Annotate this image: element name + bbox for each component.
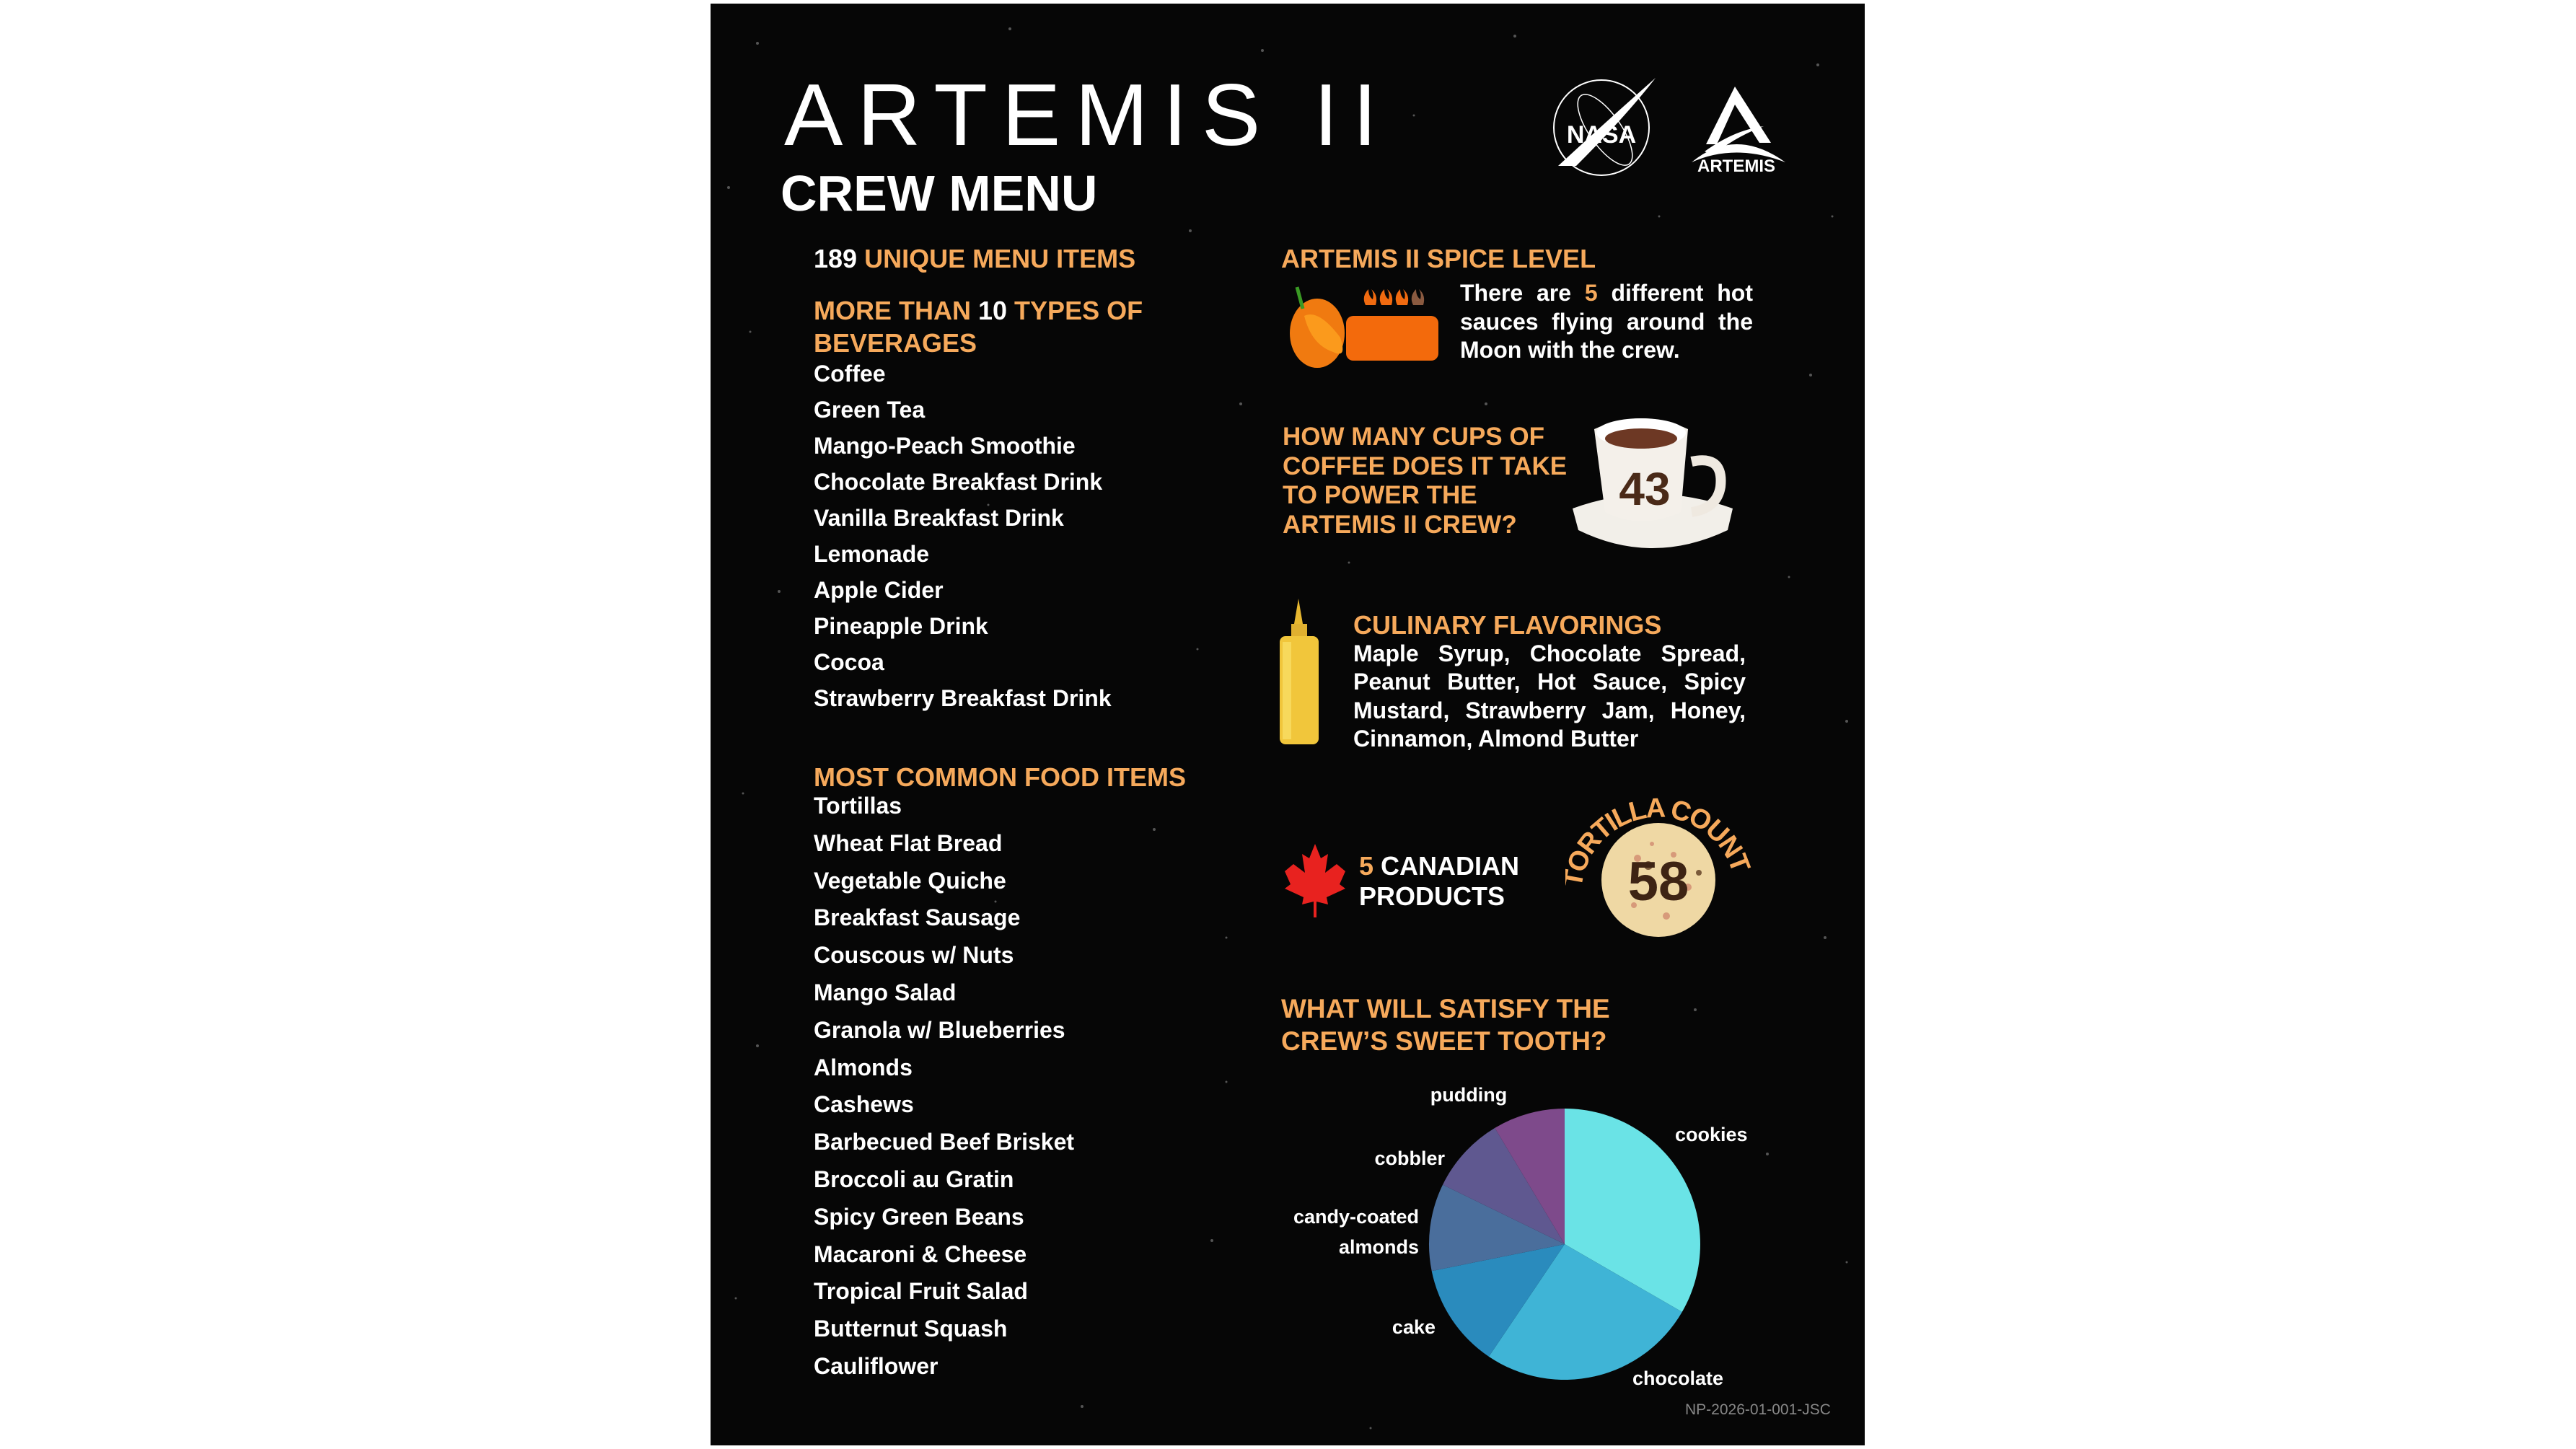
list: beverages: Green Tea: [814, 397, 925, 423]
text: flavorings list: Peanut Butter, Hot Sauce, Spicy: [1353, 669, 1746, 695]
pie chart: sweets: candy-coated: [1293, 1206, 1419, 1228]
list: food items: Breakfast Sausage: [814, 904, 1020, 930]
list: food items: Mango Salad: [814, 979, 956, 1005]
text: hot sauces: Moon with the crew.: [1460, 337, 1680, 363]
heading: coffee question: [1283, 423, 1567, 539]
text: flavorings list: Maple Syrup, Chocolate Spread,: [1353, 640, 1746, 666]
heading: sweet tooth: [1281, 994, 1610, 1056]
logo: Artemis: [1692, 87, 1785, 176]
list: food items: Vegetable Quiche: [814, 868, 1006, 894]
logo: NASA: NASA: [1567, 121, 1636, 149]
list: beverages: [814, 361, 1112, 711]
list: food items: Wheat Flat Bread: [814, 830, 1002, 856]
icon: maple leaf: [1285, 844, 1345, 917]
list: beverages: Cocoa: [814, 649, 884, 675]
text: hot sauces: [1460, 280, 1753, 363]
heading: coffee question: TO POWER THE: [1283, 481, 1477, 509]
icon: mustard bottle: [1280, 599, 1319, 744]
logo: Artemis: ARTEMIS: [1697, 157, 1775, 176]
icon: coffee cup 43: 43: [1619, 463, 1671, 515]
list: food items: Spicy Green Beans: [814, 1204, 1024, 1230]
stat: 189 unique menu items: 189 UNIQUE MENU ITEMS: [814, 244, 1135, 273]
list: food items: Granola w/ Blueberries: [814, 1017, 1065, 1043]
list: food items: Cashews: [814, 1091, 914, 1117]
heading: coffee question: COFFEE DOES IT TAKE: [1283, 452, 1567, 480]
list: beverages: Apple Cider: [814, 577, 944, 603]
list: beverages: Coffee: [814, 361, 886, 387]
list: food items: Tropical Fruit Salad: [814, 1278, 1028, 1304]
list: food items: Barbecued Beef Brisket: [814, 1129, 1074, 1155]
list: food items: Butternut Squash: [814, 1316, 1007, 1342]
logo: NASA: [1553, 78, 1656, 176]
list: beverages: Chocolate Breakfast Drink: [814, 469, 1102, 495]
heading: coffee question: ARTEMIS II CREW?: [1283, 511, 1517, 539]
icon: pepper and hot sauce: [1290, 286, 1438, 368]
list: food items: [814, 793, 1074, 1379]
heading: spice level: ARTEMIS II SPICE LEVEL: [1281, 244, 1596, 273]
list: food items: Macaroni & Cheese: [814, 1241, 1027, 1267]
heading: culinary flavorings: CULINARY FLAVORINGS: [1353, 610, 1661, 640]
list: beverages: Mango-Peach Smoothie: [814, 433, 1076, 459]
list: food items: Couscous w/ Nuts: [814, 942, 1014, 968]
list: beverages: Pineapple Drink: [814, 613, 988, 639]
text: flavorings list: [1353, 640, 1746, 752]
pie chart: sweets: cobbler: [1374, 1148, 1445, 1169]
heading: beverages: MORE THAN 10 TYPES OF: [814, 296, 1143, 325]
text: flavorings list: Mustard, Strawberry Jam, Honey,: [1353, 697, 1746, 723]
text: canadian products: [1359, 851, 1519, 911]
list: food items: Cauliflower: [814, 1353, 938, 1379]
pie chart: sweets: pudding: [1430, 1084, 1507, 1106]
text: hot sauces: sauces flying around the: [1460, 309, 1753, 335]
pie chart: sweets: chocolate: [1632, 1367, 1723, 1389]
list: beverages: Strawberry Breakfast Drink: [814, 685, 1112, 711]
heading: coffee question: HOW MANY CUPS OF: [1283, 423, 1544, 451]
text: flavorings list: Cinnamon, Almond Butter: [1353, 726, 1638, 752]
heading: beverages: BEVERAGES: [814, 328, 977, 358]
heading: crew menu: CREW MENU: [781, 165, 1097, 221]
pie chart: sweets: cake: [1392, 1316, 1436, 1338]
heading: sweet tooth: WHAT WILL SATISFY THE: [1281, 994, 1610, 1023]
badge: tortilla count 58: [1565, 798, 1751, 937]
heading: beverages: [814, 296, 1143, 358]
footer code: NP-2026-01-001-JSC: [1685, 1401, 1831, 1418]
list: beverages: Lemonade: [814, 541, 929, 567]
pie chart: sweets: almonds: [1339, 1236, 1419, 1258]
text: hot sauces: There are 5 different hot: [1460, 280, 1753, 306]
list: food items: Almonds: [814, 1054, 913, 1080]
list: food items: Tortillas: [814, 793, 902, 819]
text: canadian products: PRODUCTS: [1359, 881, 1505, 911]
icon: coffee cup 43: [1573, 418, 1733, 548]
pie chart: sweets: cookies: [1675, 1124, 1748, 1145]
list: beverages: Vanilla Breakfast Drink: [814, 505, 1064, 531]
heading: most common food items: MOST COMMON FOOD ITEMS: [814, 762, 1186, 792]
list: food items: Broccoli au Gratin: [814, 1166, 1014, 1192]
badge: tortilla count 58: 58: [1628, 851, 1689, 912]
text: canadian products: 5 CANADIAN: [1359, 851, 1519, 881]
heading: sweet tooth: CREW’S SWEET TOOTH?: [1281, 1026, 1607, 1056]
